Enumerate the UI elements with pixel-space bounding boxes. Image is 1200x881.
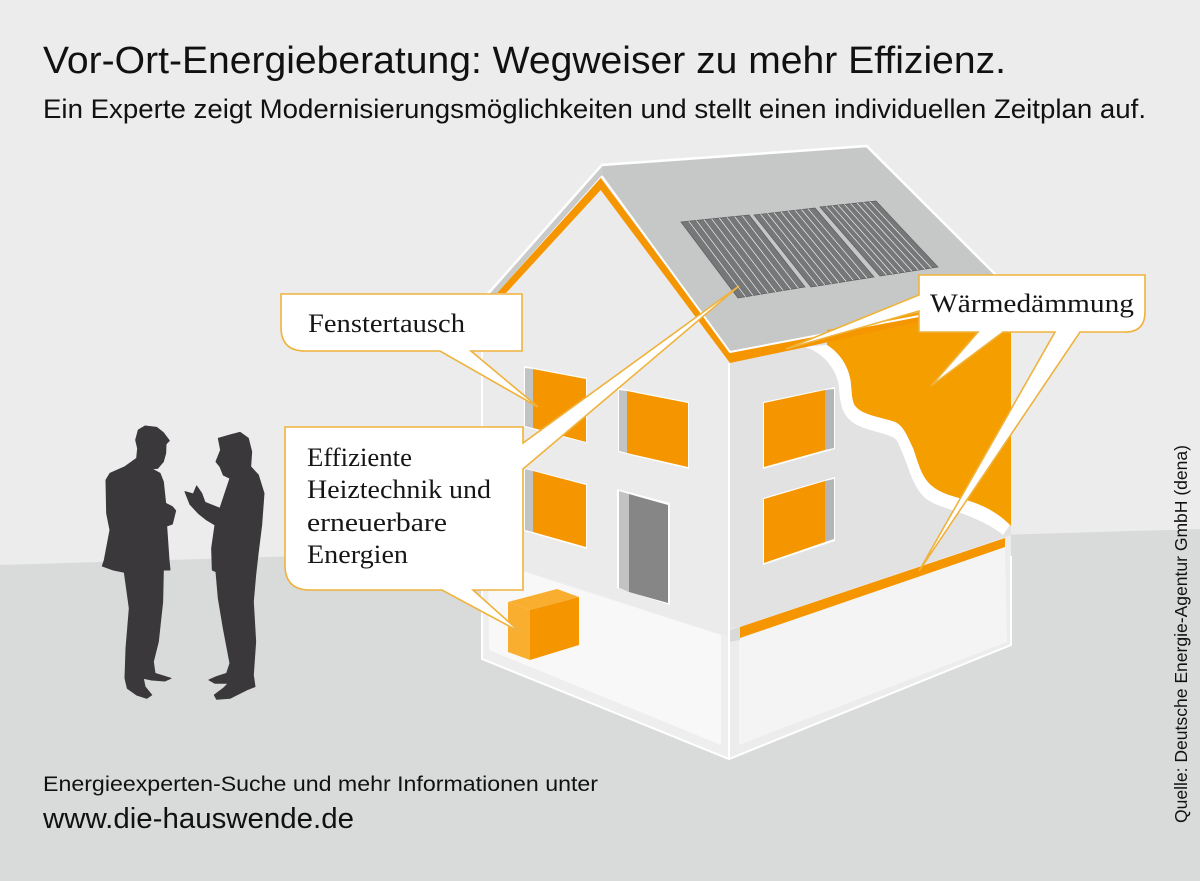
window: right lower — [763, 477, 835, 565]
window: left upper 1 — [524, 366, 587, 443]
callout: Fenstertausch: Fenstertausch — [308, 309, 465, 338]
window: left upper 2 — [618, 388, 689, 469]
insulation: orange wall section — [827, 295, 1011, 526]
insulation: white cut edge — [805, 345, 1010, 535]
callout: Effiziente Heiztechnik und erneuerbare Energien: Energien — [307, 540, 408, 569]
callout: Effiziente Heiztechnik und erneuerbare Energien: Effiziente — [307, 443, 412, 472]
left wall — [482, 190, 729, 759]
footer text: Energieexperten-Suche und mehr Informationen unter — [43, 772, 598, 796]
source note: Quelle: Deutsche Energie-Agentur GmbH (dena) — [1171, 445, 1191, 823]
callout: Fenstertausch — [281, 294, 538, 407]
roof — [486, 146, 1011, 352]
illustration: house — [482, 146, 1011, 759]
right wall — [729, 300, 1011, 759]
callout: Wärmedämmung: Wärmedämmung — [930, 289, 1134, 318]
footer url: www.die-hauswende.de — [42, 803, 354, 835]
callout: Effiziente Heiztechnik und erneuerbare Energien: Heiztechnik und — [307, 475, 491, 504]
callout: Effiziente Heiztechnik und erneuerbare Energien: erneuerbare — [307, 508, 447, 537]
solar panels — [681, 201, 938, 298]
roof white edge — [602, 176, 919, 352]
title: Vor-Ort-Energieberatung: Wegweiser zu mehr Effizienz. — [43, 40, 1006, 82]
right wall basement — [729, 535, 1011, 759]
man left — [102, 426, 176, 698]
window: right upper — [763, 387, 835, 469]
basement ceiling insulation: orange strip — [740, 538, 1005, 638]
man right — [185, 432, 264, 699]
wall outlines — [482, 320, 1011, 759]
subtitle: Ein Experte zeigt Modernisierungsmöglichkeiten und stellt einen individuellen Zeitplan auf. — [43, 94, 1146, 124]
roof insulation: orange stripe — [497, 178, 919, 363]
door — [617, 489, 670, 605]
heating unit box — [508, 589, 579, 660]
left wall basement — [482, 557, 729, 759]
silhouettes: two men talking — [102, 426, 264, 699]
callout: Effiziente Heiztechnik und erneuerbare Energien — [285, 286, 739, 632]
callout: Wärmedämmung — [786, 275, 1145, 571]
window: left lower — [524, 468, 587, 549]
